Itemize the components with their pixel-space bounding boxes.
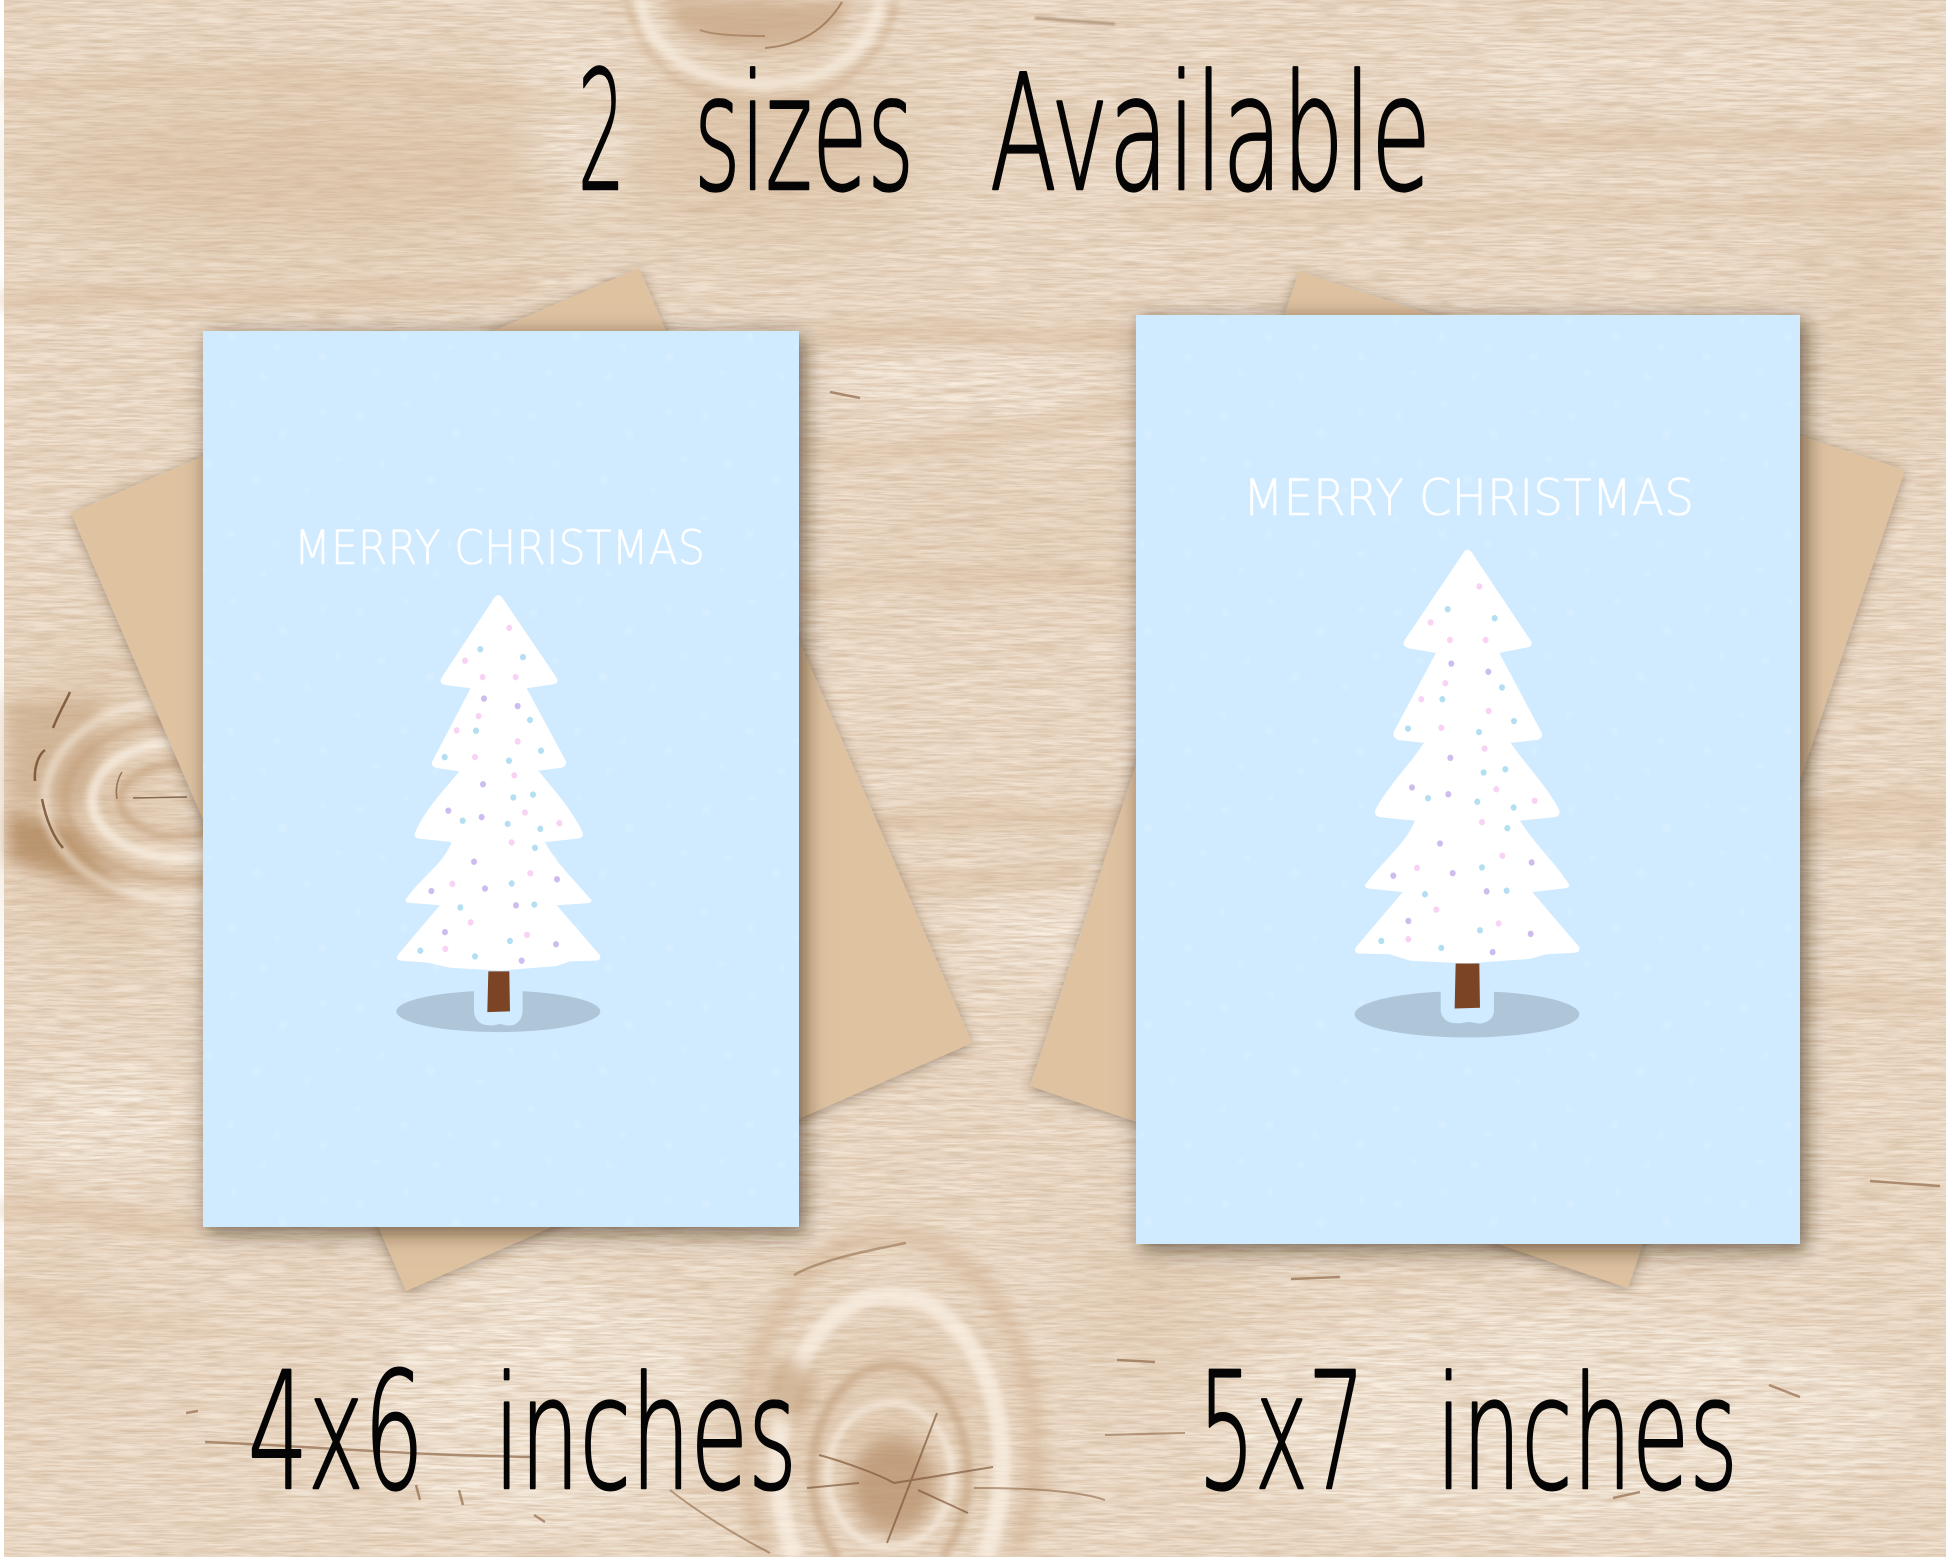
title — [578, 36, 1431, 228]
envelope: left — [71, 268, 972, 1291]
trunk — [1455, 964, 1480, 1009]
card: 5x7 — [1136, 315, 1800, 1244]
size label: 4x6 inches — [248, 1339, 797, 1527]
ground shadow — [396, 991, 600, 1032]
snow patch at trunk — [474, 990, 523, 1026]
envelope: right — [1030, 271, 1905, 1288]
knot: top — [628, 0, 1115, 103]
knot: left — [8, 692, 315, 900]
sprinkles — [417, 625, 562, 964]
tree: 5x7 — [1355, 550, 1580, 1037]
sprinkles — [1378, 583, 1538, 955]
snowy tree crown — [1355, 550, 1580, 964]
title: 2 — [578, 36, 625, 228]
card: 4x6 — [203, 331, 799, 1227]
trunk — [487, 971, 510, 1012]
card face: 4x6 — [203, 331, 799, 1227]
snow patch at trunk — [1441, 990, 1494, 1024]
tree: 4x6 — [396, 595, 600, 1032]
size label: 4x6 inches: 4x6 — [248, 1339, 424, 1527]
ground shadow — [1355, 991, 1579, 1037]
snowy tree crown — [397, 595, 600, 971]
card face: 5x7 — [1136, 315, 1800, 1244]
title: Available — [990, 40, 1431, 227]
size label: 4x6 inches: inches — [494, 1343, 797, 1525]
knot: bottom — [670, 1236, 1185, 1557]
size label: 5x7 inches: inches — [1436, 1343, 1738, 1525]
greeting: 4x6: MERRY CHRISTMAS — [294, 521, 705, 576]
title: sizes — [694, 40, 914, 227]
wood crack marks — [186, 392, 1940, 1522]
size label: 5x7 inches — [1198, 1339, 1738, 1527]
greeting: 5x7: MERRY CHRISTMAS — [1243, 469, 1694, 527]
size label: 5x7 inches: 5x7 — [1198, 1339, 1365, 1527]
